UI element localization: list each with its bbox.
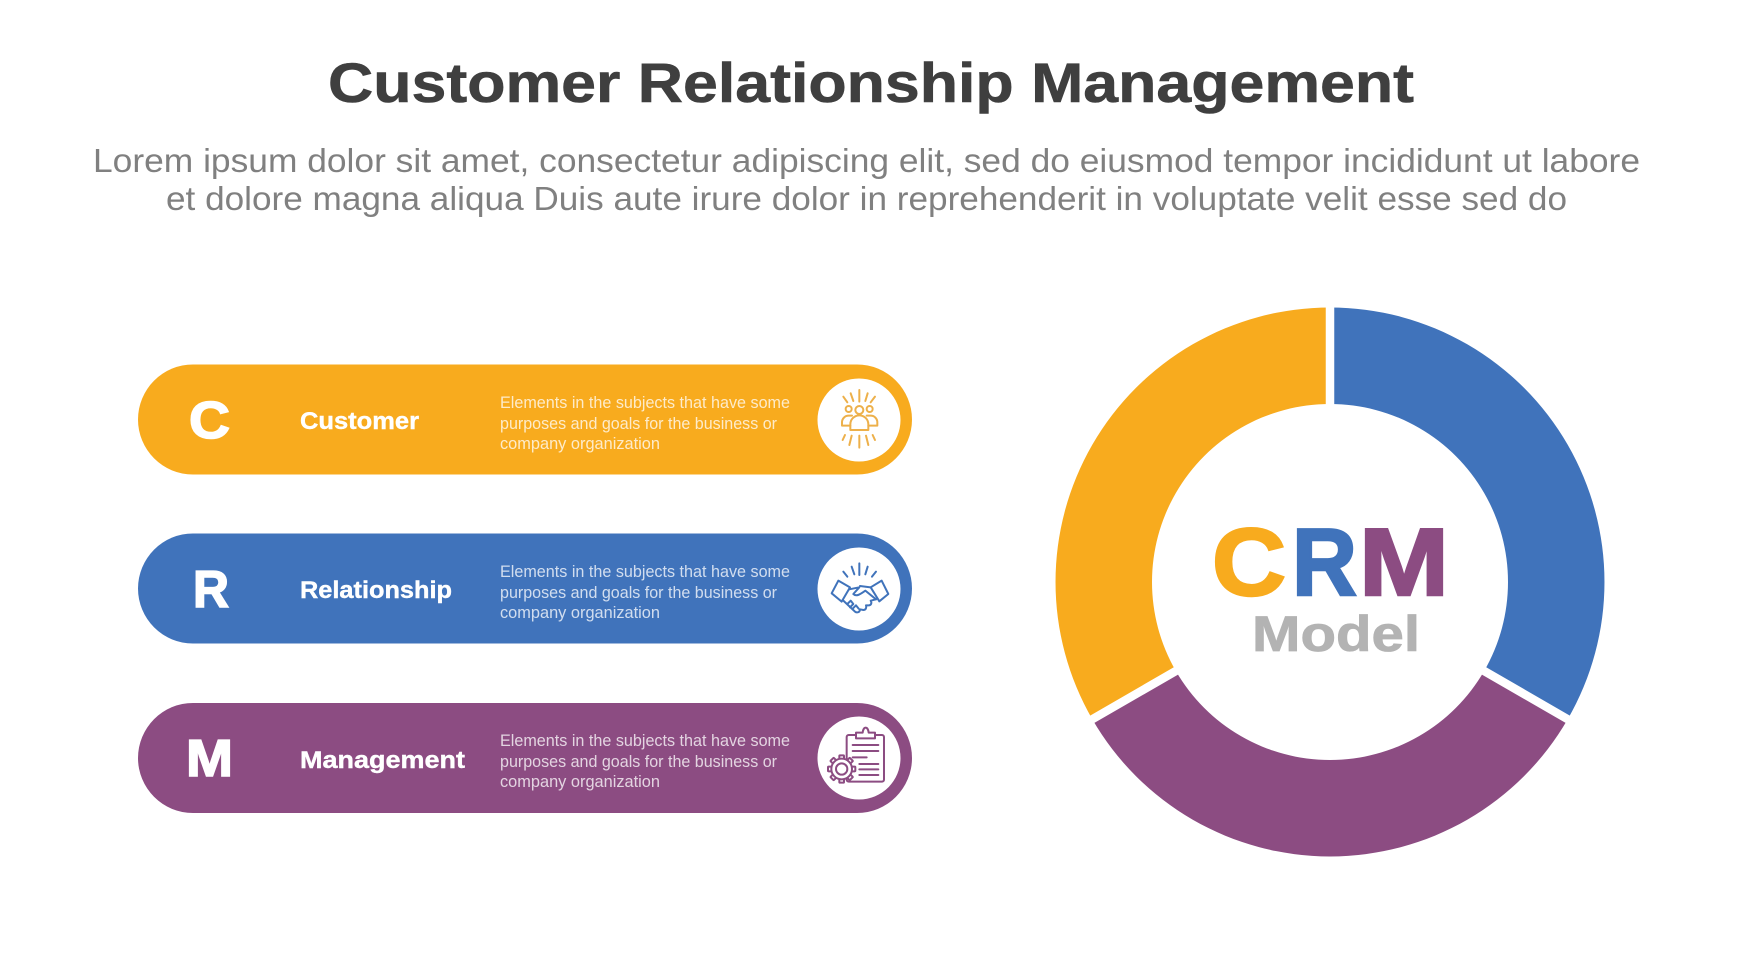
label Customer: Customer	[300, 408, 419, 435]
bar background	[138, 364, 912, 474]
subtitle text block: et dolore magna aliqua Duis aute irure dolor in reprehenderit in voluptate velit esse sed do	[166, 180, 1567, 217]
icon: handshake	[832, 563, 888, 612]
segment: Management (purple)	[1092, 671, 1568, 856]
bar background	[138, 534, 912, 644]
description: company organization	[500, 603, 660, 622]
subtitle text block	[93, 142, 1640, 217]
icon: clipboard and gear	[828, 728, 884, 783]
description	[500, 393, 790, 453]
description: purposes and goals for the business or	[500, 752, 777, 771]
segment: Relationship (blue)	[1330, 308, 1604, 719]
title: Customer Relationship Management	[328, 51, 1414, 114]
description: company organization	[500, 434, 660, 453]
center label CRM: R	[1292, 509, 1357, 616]
description: purposes and goals for the business or	[500, 583, 777, 602]
label Management: Management	[300, 747, 465, 774]
icon circle	[818, 378, 900, 462]
panel: Customer bar	[138, 364, 912, 474]
bar background	[138, 703, 912, 813]
center label CRM: M	[1359, 509, 1449, 616]
icon circle	[818, 716, 900, 800]
description	[500, 731, 790, 791]
letter C: C	[189, 392, 230, 450]
segment: Customer (yellow)	[1056, 308, 1330, 719]
center label CRM: C	[1212, 509, 1286, 616]
panel: Relationship bar	[138, 534, 912, 644]
letter M: M	[186, 730, 233, 788]
center label CRM	[1212, 509, 1449, 616]
description: purposes and goals for the business or	[500, 414, 777, 433]
description: Elements in the subjects that have some	[500, 731, 790, 750]
panel: Management bar	[138, 703, 912, 813]
center label Model: Model	[1252, 606, 1420, 662]
description	[500, 562, 790, 622]
letter R: R	[193, 561, 229, 619]
icon: people	[842, 390, 877, 448]
description: company organization	[500, 772, 660, 791]
donut chart	[1056, 295, 1604, 856]
label Relationship: Relationship	[300, 577, 452, 604]
icon circle	[818, 548, 900, 630]
subtitle text block: Lorem ipsum dolor sit amet, consectetur adipiscing elit, sed do eiusmod tempor incididunt ut labore	[93, 142, 1640, 179]
description: Elements in the subjects that have some	[500, 393, 790, 412]
description: Elements in the subjects that have some	[500, 562, 790, 581]
